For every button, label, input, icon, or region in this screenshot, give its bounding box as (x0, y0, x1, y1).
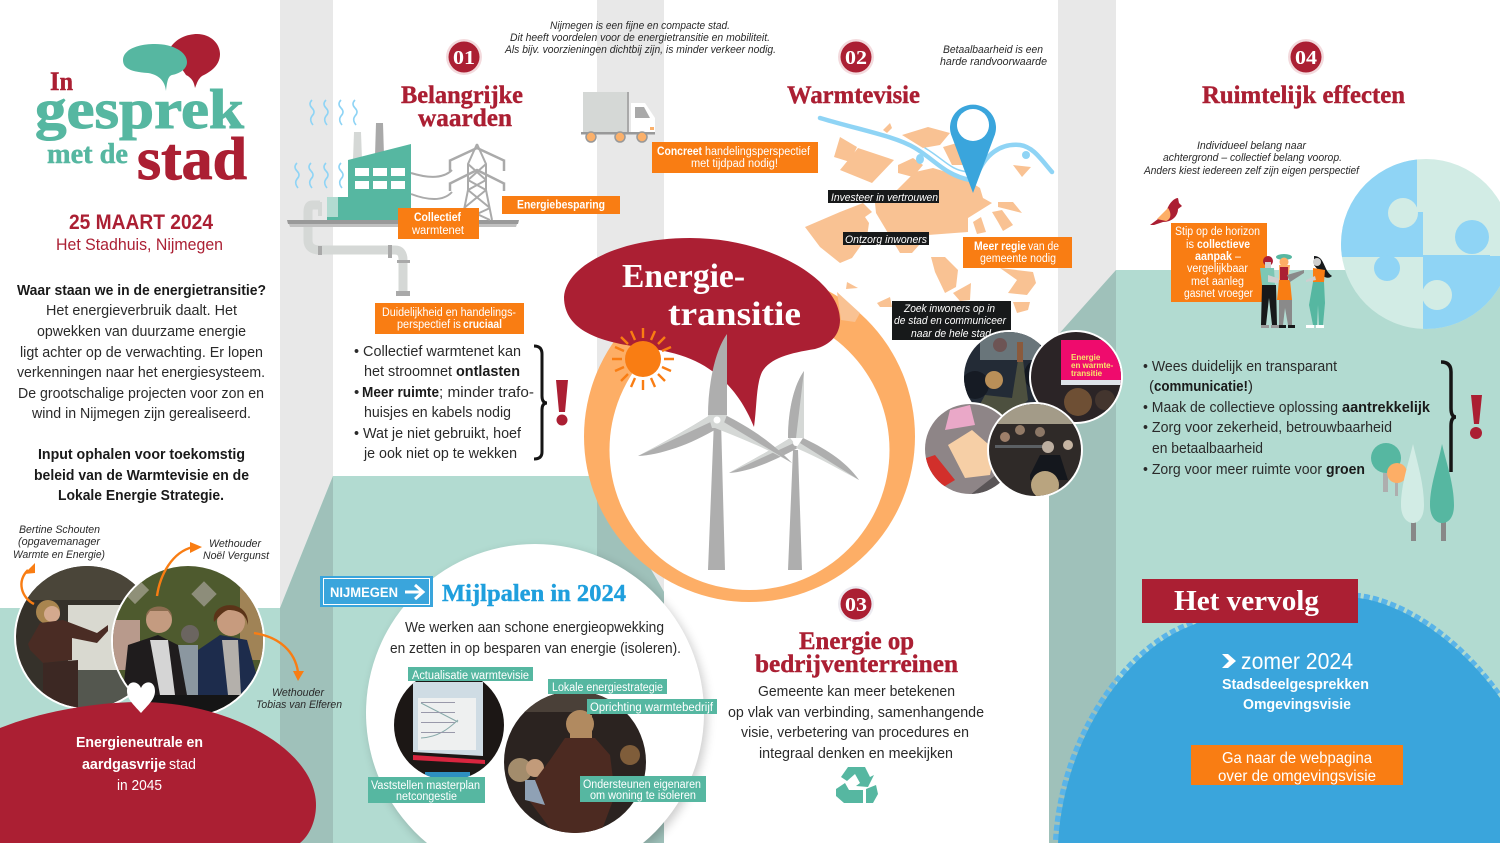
badge 03 (838, 586, 874, 622)
speaker captions: Noël Vergunst (203, 550, 270, 562)
milestone labels: Lokale energiestrategie (552, 682, 663, 694)
illustration: factory, pipes and pylon (287, 100, 519, 296)
bullet list: ruimtelijk effecten: groen (1326, 461, 1365, 478)
energy transition ring (584, 271, 915, 602)
milestone labels: Ondersteunen eigenaren (583, 779, 701, 791)
red blob: goal 2045: stad (169, 756, 196, 773)
speaker captions (13, 524, 342, 711)
heading: Het vervolg: Het vervolg (1174, 586, 1319, 617)
river (820, 118, 1052, 180)
photo: chart on screen (394, 681, 504, 777)
speaker captions: Bertine Schouten (19, 524, 100, 536)
milestone labels: netcongestie (396, 791, 457, 803)
text: bedrijventerreinen (728, 683, 984, 762)
bullet list: belangrijke waarden: Meer ruimte (362, 384, 439, 401)
photo: presentation screen: Energie (1071, 353, 1101, 362)
label: Duidelijkheid en handelingsperspectief: Duidelijkheid en handelings- (382, 307, 516, 319)
milestone labels: Oprichting warmtebedrijf (590, 702, 714, 714)
text: bedrijventerreinen: integraal denken en meekijken (759, 745, 953, 762)
red blob: goal 2045: aardgasvrije (82, 756, 166, 773)
speaker captions: (opgavemanager (18, 536, 101, 548)
milestone labels: Actualisatie warmtevisie (412, 670, 529, 682)
intro text: Waar staan we in de energietransitie? (17, 282, 266, 299)
heading: Het vervolg (1142, 579, 1358, 623)
text: bedrijventerreinen: Gemeente kan meer betekenen (758, 683, 955, 700)
intro note: mobility: Nijmegen is een fijne en compacte stad. (550, 20, 730, 32)
label: Stip op de horizon: gasnet vroeger (1184, 288, 1253, 300)
label: Stip op de horizon: is (1186, 239, 1194, 251)
photo: presentation screen: en warmte- (1071, 361, 1114, 370)
label: Duidelijkheid en handelingsperspectief (375, 303, 524, 334)
illustration: three people talking (1260, 254, 1332, 328)
label: Meer regie: gemeente nodig (980, 253, 1056, 265)
label: Concreet handelingsperspectief: handelingsperspectief (705, 146, 811, 158)
heading: Ruimtelijk effecten: Ruimtelijk effecten (1202, 82, 1405, 109)
label: Ontzorg inwoners: Ontzorg inwoners (845, 234, 927, 246)
intro text: verkenningen naar het energiesysteem. (17, 364, 265, 381)
note: betaalbaarheid: Betaalbaarheid is een (943, 44, 1043, 56)
note: individueel belang: achtergrond – collectief belang voorop. (1163, 152, 1342, 164)
intro text: ligt achter op de verwachting. Er lopen (20, 344, 263, 361)
badge 04 (1288, 39, 1324, 75)
bullet list: ruimtelijk effecten: aantrekkelijk (1342, 399, 1431, 416)
heading: Energie op bedrijventerreinen: Energie op (799, 628, 914, 655)
icon: wind turbines (638, 334, 859, 570)
bullet list: ruimtelijk effecten: • Maak de collectieve oplossing (1143, 399, 1338, 416)
logo: In gesprek met de stad (35, 34, 247, 192)
label: Zoek inwoners op: de stad en communiceer (894, 315, 1007, 327)
sign: Nijmegen: NIJMEGEN (330, 585, 398, 600)
intro text (17, 282, 266, 504)
person 1 (1260, 256, 1286, 328)
label: Stip op de horizon: Stip op de horizon (1175, 226, 1260, 238)
photo: raised hand (964, 330, 1042, 415)
label: Concreet handelingsperspectief: Concreet (657, 146, 702, 158)
text: schone energie: We werken aan schone energieopwekking (405, 619, 664, 636)
person 3 (1306, 256, 1332, 328)
photo: post-it notes (925, 402, 1002, 494)
bullet list: ruimtelijk effecten: ) (1248, 378, 1253, 395)
bullet list: ruimtelijk effecten (1143, 358, 1431, 478)
icon: red bird (1150, 198, 1182, 225)
intro text: Lokale Energie Strategie. (58, 487, 224, 504)
heading: Energie op bedrijventerreinen (755, 628, 958, 678)
heading: Belangrijke waarden: waarden (418, 105, 512, 132)
icon: truck (581, 92, 655, 142)
milestone labels (368, 667, 717, 803)
bullet list: belangrijke waarden: huisjes en kabels nodig (364, 404, 511, 421)
heading: Energie op bedrijventerreinen: bedrijventerreinen (755, 651, 958, 678)
intro note: mobility: Als bijv. voorzieningen dichtbij zijn, is minder verkeer nodig. (504, 44, 776, 56)
bullet list: belangrijke waarden: ; minder trafo- (439, 384, 534, 401)
icon: location pin (950, 105, 996, 193)
icon: speech bubbles (123, 34, 220, 91)
label: Stip op de horizon: vergelijkbaar (1187, 263, 1248, 275)
bullet list: belangrijke waarden: • (354, 384, 359, 401)
badge 02 (838, 39, 874, 75)
button: webpagina omgevingsvisie: Ga naar de webpagina (1222, 750, 1372, 767)
speech bubble: Energietransitie (564, 238, 840, 427)
bullet list: ruimtelijk effecten: ( (1149, 378, 1154, 395)
heading: Belangrijke waarden (401, 82, 523, 132)
milestone labels: Vaststellen masterplan (371, 780, 480, 792)
bullet list: ruimtelijk effecten: • Zorg voor meer ruimte voor (1143, 461, 1322, 478)
panel: milestones circle (366, 544, 707, 843)
photo: presentation screen: transitie (1071, 369, 1103, 378)
logo: In gesprek met de stad: stad (137, 126, 247, 192)
icon: power pylon (411, 144, 505, 220)
label: Energiebesparing: Energiebesparing (517, 200, 605, 212)
heading: Warmtevisie: Warmtevisie (787, 82, 920, 109)
panel: blue hill (1058, 596, 1500, 843)
bullet list: belangrijke waarden: • Wat je niet gebruikt, hoef (354, 425, 522, 442)
photo: Bertine Schouten presenting (14, 566, 136, 708)
badge 04: 04 (1295, 47, 1317, 69)
photo: two aldermen (111, 566, 265, 713)
bullet list: ruimtelijk effecten: • Zorg voor zekerheid, betrouwbaarheid (1143, 419, 1392, 436)
large turbine (638, 334, 792, 570)
speaker captions: Tobias van Elferen (256, 699, 342, 711)
bullet list: ruimtelijk effecten: • Wees duidelijk en transparant (1143, 358, 1338, 375)
text: schone energie (390, 619, 681, 657)
label: Zoek inwoners op: naar de hele stad (911, 328, 992, 340)
red blob: goal 2045: Energieneutrale en (76, 734, 203, 751)
label: Investeer in vertrouwen: Investeer in vertrouwen (831, 192, 938, 204)
intro note: mobility: Dit heeft voordelen voor de energietransitie en mobiliteit. (510, 32, 770, 44)
icon: heat waves (295, 100, 357, 188)
icon: heart (127, 682, 155, 713)
brace and exclamation mark (1441, 362, 1482, 472)
label: Meer regie (963, 237, 1072, 268)
bullet list: belangrijke waarden: het stroomnet (364, 363, 453, 380)
label: Collectief warmtenet (398, 208, 479, 239)
logo: In gesprek met de stad: In (50, 67, 74, 96)
label: Stip op de horizon: collectieve (1197, 239, 1250, 251)
speaker captions: Wethouder (209, 538, 262, 550)
speech bubble: Energietransitie: transitie (668, 296, 801, 333)
label: Collectief warmtenet: warmtenet (411, 225, 465, 237)
speaker captions: Wethouder (272, 687, 325, 699)
bullet list: belangrijke waarden: ontlasten (456, 363, 520, 380)
intro text: Het energieverbruik daalt. Het (46, 302, 238, 319)
label: Meer regie: Meer regie (974, 241, 1026, 253)
badge 01: 01 (453, 47, 475, 69)
badge 01 (446, 39, 482, 75)
bullet list: ruimtelijk effecten: communicatie! (1154, 378, 1248, 395)
intro text: De grootschalige projecten voor zon en (18, 385, 264, 402)
logo: In gesprek met de stad: gesprek (35, 79, 245, 141)
icon: factory (327, 123, 411, 220)
logo: In gesprek met de stad: met de (47, 139, 128, 170)
label: Concreet handelingsperspectief: met tijdpad nodig! (691, 158, 778, 170)
speech bubble: Energietransitie: Energie- (622, 258, 745, 295)
red blob: goal 2045: in 2045 (117, 777, 162, 794)
label: Concreet handelingsperspectief (652, 142, 818, 173)
event date and place (56, 211, 223, 254)
label: Stip op de horizon: aanpak (1195, 251, 1233, 263)
platform (287, 220, 519, 227)
badge 03: 03 (845, 594, 867, 616)
sign: Nijmegen (320, 576, 433, 607)
person 2 (1276, 254, 1304, 328)
label: Stip op de horizon: – (1235, 251, 1242, 263)
intro text: beleid van de Warmtevisie en de (34, 467, 249, 484)
note: betaalbaarheid: harde randvoorwaarde (940, 56, 1047, 68)
text: zomer 2024: Stadsdeelgesprekken (1222, 676, 1369, 693)
label: Duidelijkheid en handelingsperspectief: cruciaal (463, 319, 502, 331)
text: zomer 2024: zomer 2024 (1241, 648, 1353, 674)
arrows to speakers (21, 542, 304, 681)
event date and place: 25 MAART 2024 (69, 211, 213, 234)
label: Collectief warmtenet: Collectief (414, 212, 461, 224)
text: zomer 2024 (1222, 648, 1369, 713)
text: zomer 2024: Omgevingsvisie (1243, 696, 1351, 713)
note: betaalbaarheid (940, 44, 1047, 68)
text: bedrijventerreinen: visie, verbetering van procedures en (741, 724, 969, 741)
bullet list: ruimtelijk effecten: en betaalbaarheid (1152, 440, 1263, 457)
intro text: Input ophalen voor toekomstig (38, 446, 245, 463)
note: individueel belang (1143, 140, 1360, 177)
button: webpagina omgevingsvisie (1191, 745, 1403, 785)
bullet list: belangrijke waarden: • Collectief warmtenet kan (354, 343, 521, 360)
text: bedrijventerreinen: op vlak van verbinding, samenhangende (728, 704, 984, 721)
label: Zoek inwoners op: Zoek inwoners op in (903, 303, 995, 315)
label: Zoek inwoners op (892, 301, 1011, 340)
small turbine (729, 371, 859, 570)
bullet list: belangrijke waarden: je ook niet op te wekken (363, 445, 517, 462)
bullet list: belangrijke waarden (354, 343, 534, 462)
badge 02: 02 (845, 47, 867, 69)
label: Meer regie: van de (1028, 241, 1059, 253)
intro note: mobility (504, 20, 776, 56)
icon: pipes (308, 202, 410, 296)
speaker captions: Warmte en Energie) (13, 549, 105, 561)
note: individueel belang: Individueel belang naar (1197, 140, 1307, 152)
icon: puzzle (1341, 159, 1500, 330)
milestone labels: om woning te isoleren (590, 790, 696, 802)
brace and exclamation mark (534, 346, 568, 459)
icon: recycling (836, 767, 878, 803)
label: Stip op de horizon: met aanleg (1191, 276, 1244, 288)
icon: trees (1371, 443, 1454, 541)
label: Duidelijkheid en handelingsperspectief: perspectief is (397, 319, 461, 331)
red blob: goal 2045 (0, 702, 316, 843)
map of Nijmegen (805, 105, 1052, 313)
label: Energiebesparing (502, 196, 620, 214)
note: individueel belang: Anders kiest iedereen zelf zijn eigen perspectief (1143, 165, 1360, 177)
text: schone energie: en zetten in op besparen van energie (isoleren). (390, 640, 681, 657)
photo: audience (985, 400, 1085, 500)
heading: Belangrijke waarden: Belangrijke (401, 82, 523, 109)
event date and place: Het Stadhuis, Nijmegen (56, 235, 223, 254)
photo: presentation screen (1029, 330, 1123, 425)
heading: Mijlpalen in 2024: Mijlpalen in 2024 (442, 581, 626, 607)
icon: sun (612, 328, 674, 390)
intro text: wind in Nijmegen zijn gerealiseerd. (31, 405, 251, 422)
intro text: opwekken van duurzame energie (37, 323, 246, 340)
label: Stip op de horizon (1171, 223, 1267, 302)
button: webpagina omgevingsvisie: over de omgevingsvisie (1218, 768, 1376, 785)
photo: speaker from behind (500, 690, 650, 835)
